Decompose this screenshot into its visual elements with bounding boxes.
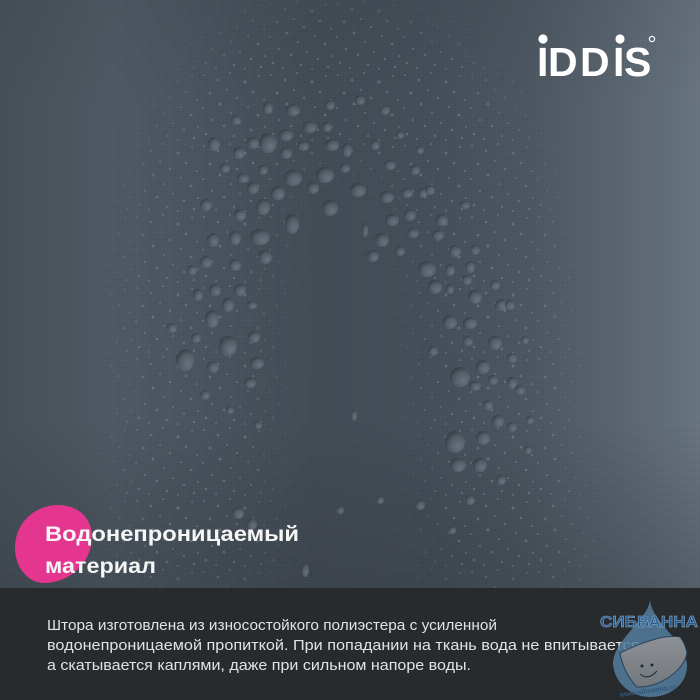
dark caption bar — [0, 588, 700, 700]
heading: Водонепроницаемый — [45, 523, 299, 546]
logo: IDDIS: IDDIS — [537, 39, 651, 85]
description text — [47, 617, 644, 674]
watermark drop — [613, 600, 687, 697]
description text: а скатывается каплями, даже при сильном напоре воды. — [47, 657, 471, 674]
pink accent blob — [15, 505, 92, 583]
watermark: Sibvanna — [600, 600, 698, 699]
watermark name: СИБВАННА — [600, 614, 698, 631]
heading — [45, 523, 299, 578]
watermark url: www.sibvanna.ru — [618, 684, 677, 699]
small water specks — [110, 1, 594, 588]
water droplets — [167, 95, 534, 577]
heading: материал — [45, 555, 156, 578]
description text: водонепроницаемой пропиткой. При попадании на ткань вода не впитывается, — [47, 637, 644, 654]
watermark bathtub — [620, 636, 687, 687]
description text: Штора изготовлена из износостойкого полиэстера с усиленной — [47, 617, 497, 634]
